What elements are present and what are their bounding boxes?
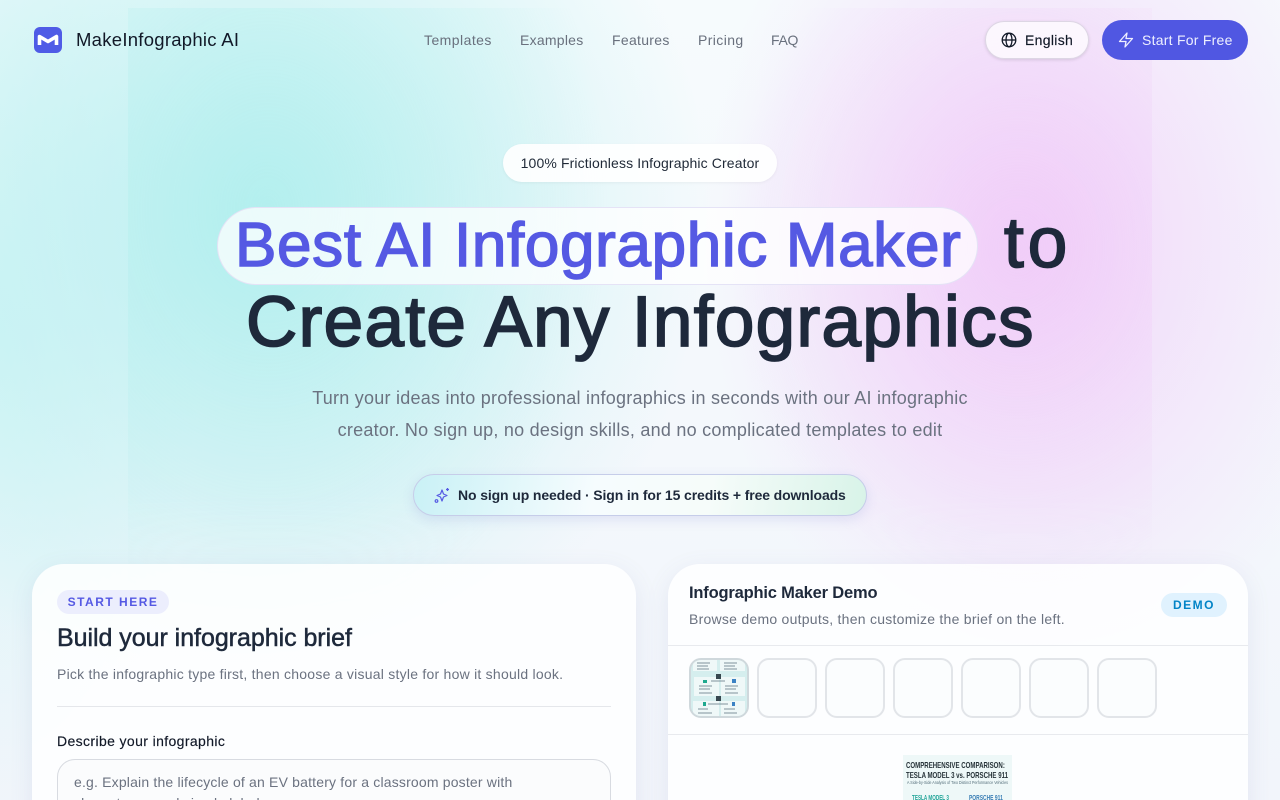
inner glow panel — [128, 8, 1152, 514]
panel: build your brief — [32, 564, 636, 800]
thumbnail 6 — [1029, 658, 1089, 718]
demo infographic preview: COMPREHENSIVE COMPARISON: — [906, 761, 1005, 770]
logo icon — [34, 27, 62, 53]
icon: globe — [1002, 32, 1016, 48]
title: to — [1004, 204, 1071, 283]
navigation — [424, 32, 798, 48]
subtitle: Turn your ideas into professional infographics in seconds with our AI infographic — [312, 388, 968, 408]
navigation: Templates — [424, 32, 492, 48]
language button — [985, 21, 1089, 59]
language button: English — [1025, 32, 1073, 48]
textarea — [57, 759, 611, 800]
icon: sparkles — [434, 488, 449, 503]
demo description: Browse demo outputs, then customize the brief on the left. — [689, 611, 1065, 627]
demo infographic preview — [903, 755, 1012, 800]
subtitle: creator. No sign up, no design skills, and no complicated templates to edit — [338, 420, 942, 440]
badge: demo: DEMO — [1173, 598, 1215, 612]
subtitle — [312, 388, 968, 440]
panel description: Pick the infographic type first, then choose a visual style for how it should look. — [57, 666, 563, 682]
divider — [57, 706, 611, 707]
thumbnail: active — [689, 658, 749, 718]
panel: demo — [668, 564, 1248, 800]
credits banner — [413, 474, 867, 516]
navigation: Features — [612, 32, 670, 48]
panel heading: Build your infographic brief — [57, 624, 352, 652]
navigation: Examples — [520, 32, 583, 48]
divider — [668, 734, 1248, 735]
title — [235, 204, 1071, 362]
divider — [668, 645, 1248, 646]
start for free button: Start For Free — [1142, 32, 1233, 48]
badge: demo — [1161, 593, 1227, 617]
demo infographic preview: TESLA MODEL 3 vs. PORSCHE 911 — [906, 770, 1008, 780]
textarea: e.g. Explain the lifecycle of an EV battery for a classroom poster with — [74, 774, 512, 790]
demo title: Infographic Maker Demo — [689, 584, 877, 602]
title: Best AI Infographic Maker — [235, 211, 961, 280]
title: Create Any Infographics — [246, 283, 1035, 362]
icon: lightning bolt — [1118, 32, 1134, 48]
brand name: MakeInfographic AI — [76, 29, 239, 50]
navigation: Pricing — [698, 32, 744, 48]
demo infographic preview: A Side-by-Side Analysis of Two Distinct Performance Vehicles — [907, 780, 1008, 785]
thumbnail 3 — [825, 658, 885, 718]
credits banner: No sign up needed · Sign in for 15 credits + free downloads — [458, 487, 846, 503]
badge: start here: START HERE — [68, 595, 158, 609]
field label: Describe your infographic — [57, 733, 225, 749]
navigation: FAQ — [771, 32, 798, 48]
thumbnail 4 — [893, 658, 953, 718]
heading highlight pill — [217, 207, 978, 285]
thumbnail 7 — [1097, 658, 1157, 718]
thumbnail 5 — [961, 658, 1021, 718]
badge: start here — [57, 590, 169, 614]
tagline pill — [503, 144, 777, 182]
thumbnail 2 — [757, 658, 817, 718]
tagline pill: 100% Frictionless Infographic Creator — [521, 155, 759, 171]
start for free button — [1102, 20, 1248, 60]
